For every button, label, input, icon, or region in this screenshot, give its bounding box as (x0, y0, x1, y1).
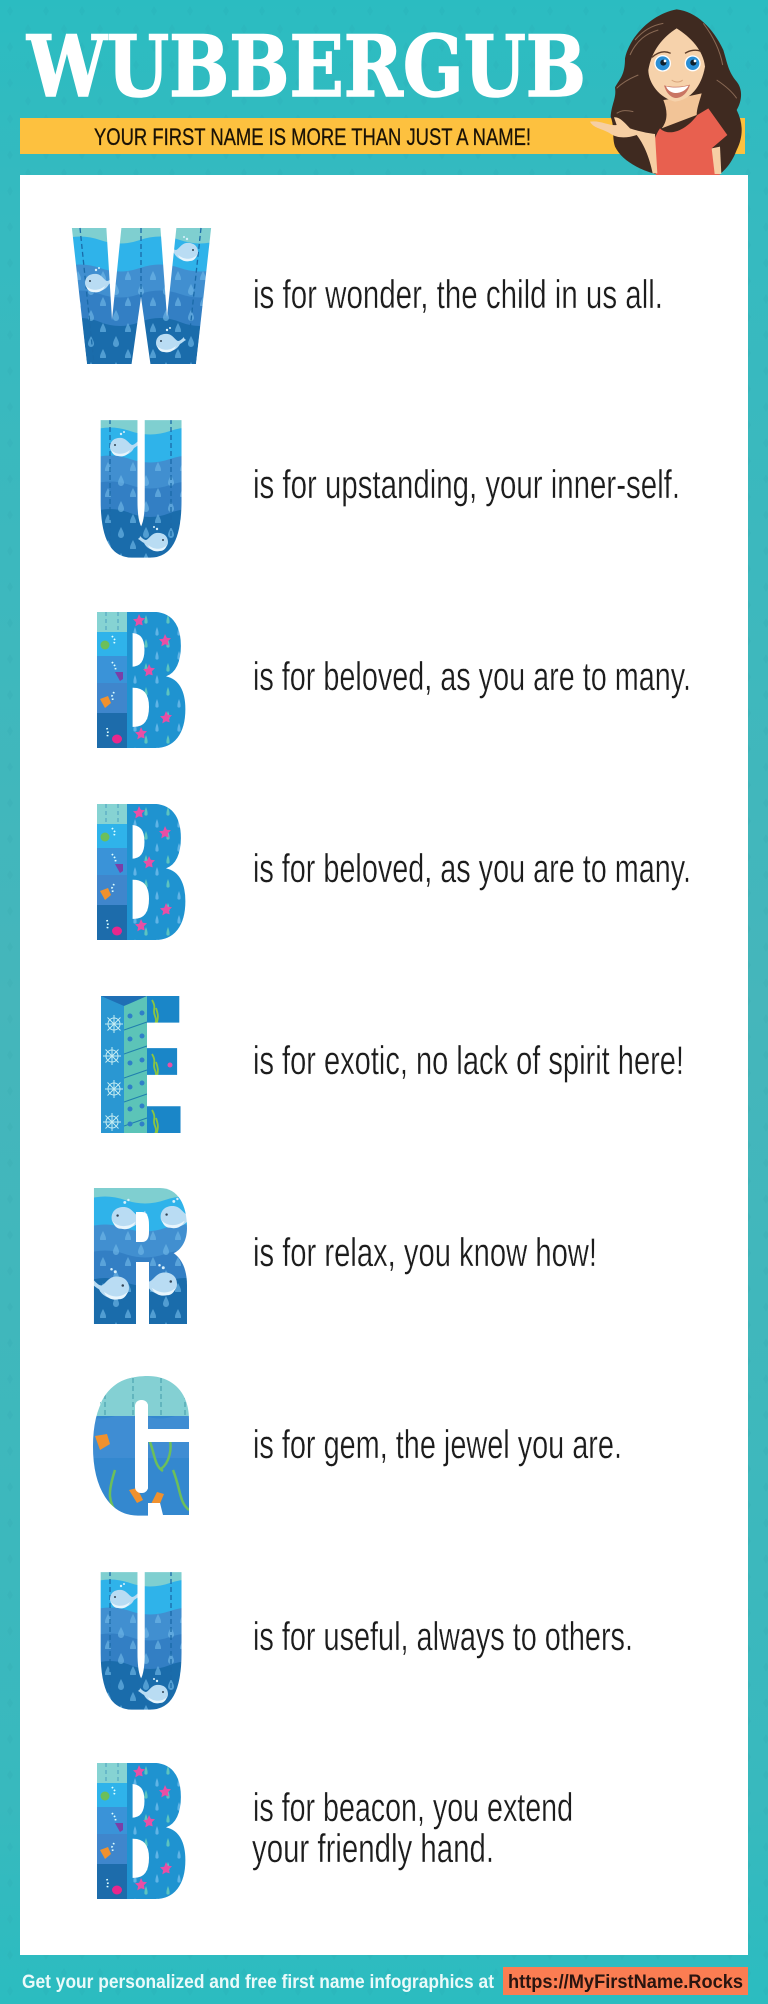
row 9 text: is for beacon, you extend (253, 1786, 573, 1830)
footer url badge: https://MyFirstName.Rocks (508, 1972, 743, 1993)
row 9 text (252, 1786, 573, 1871)
letter W (72, 228, 212, 364)
letter B (97, 612, 187, 750)
row 8 text: is for useful, always to others. (253, 1615, 633, 1659)
letter B (97, 804, 187, 942)
letter B (97, 1763, 187, 1901)
subtitle banner (20, 118, 745, 154)
title: WUBBERGUB (26, 17, 586, 116)
letter U (100, 1572, 182, 1710)
row 7 text: is for gem, the jewel you are. (253, 1423, 622, 1467)
row 9 text: your friendly hand. (252, 1827, 494, 1871)
row 6 text: is for relax, you know how! (253, 1231, 597, 1275)
letter G (93, 1376, 189, 1516)
letter U (100, 420, 182, 558)
character illustration (590, 9, 742, 175)
letter R (94, 1188, 187, 1324)
footer text: Get your personalized and free first name infographics at (22, 1972, 495, 1993)
letter E (101, 996, 181, 1133)
subtitle banner: YOUR FIRST NAME IS MORE THAN JUST A NAME! (94, 124, 531, 151)
